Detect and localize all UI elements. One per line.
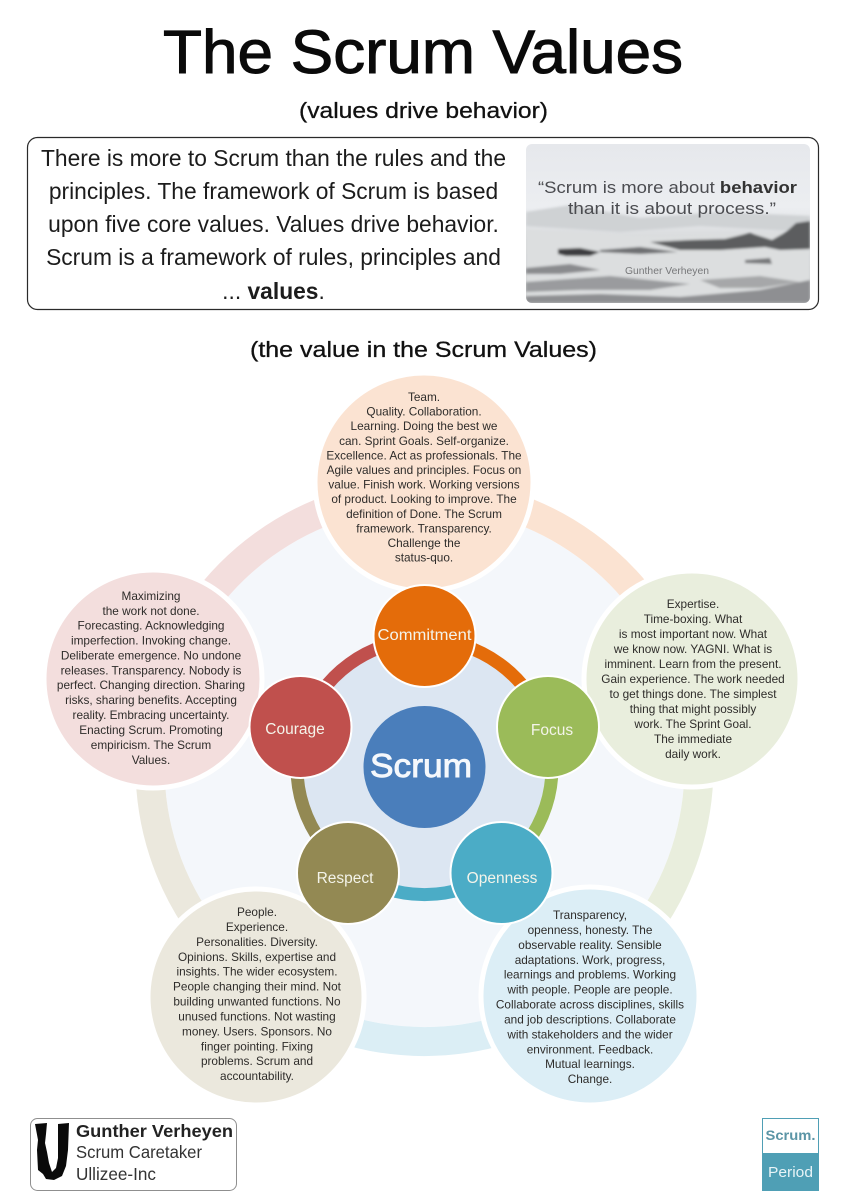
text circle: Focus: daily work. bbox=[665, 747, 721, 761]
text circle: Courage: imperfection. Invoking change. bbox=[71, 634, 231, 648]
text circle: Courage: Values. bbox=[132, 753, 170, 767]
text circle: Commitment: Team. bbox=[408, 390, 440, 404]
inner ring segments bbox=[297, 640, 552, 895]
text circle: Commitment bbox=[315, 373, 533, 591]
outer background disc bbox=[164, 507, 684, 1027]
text circle: Openness: with stakeholders and the wider bbox=[506, 1028, 673, 1042]
centre node: Scrum: Scrum bbox=[370, 747, 472, 784]
text circle: Respect: finger pointing. Fixing bbox=[201, 1040, 313, 1054]
text circle: Focus: Gain experience. The work needed bbox=[601, 672, 785, 686]
text circle: Openness: Change. bbox=[568, 1072, 612, 1086]
quote image: than it is about process.” bbox=[568, 200, 776, 218]
text circle: Focus: The immediate bbox=[654, 732, 732, 746]
node: Respect bbox=[297, 822, 399, 924]
author company: Ullizee-Inc bbox=[76, 1164, 156, 1184]
text circle: Courage: releases. Transparency. Nobody is bbox=[61, 664, 241, 678]
node: Focus bbox=[497, 676, 599, 778]
outer ring segments bbox=[150, 492, 699, 1042]
text circle: Openness: Mutual learnings. bbox=[545, 1057, 635, 1071]
text circle: Respect: People. bbox=[237, 905, 277, 919]
node: Focus: Focus bbox=[531, 722, 573, 739]
text circle: Openness: adaptations. Work, progress, bbox=[515, 953, 665, 967]
text circle: Focus: imminent. Learn from the present. bbox=[604, 657, 782, 671]
text circle: Openness: observable reality. Sensible bbox=[518, 938, 662, 952]
node: Commitment bbox=[374, 585, 476, 687]
node: Respect: Respect bbox=[317, 870, 374, 887]
text circle: Courage: the work not done. bbox=[102, 604, 200, 618]
text circle: Openness: Transparency, bbox=[553, 908, 627, 922]
text circle: Focus bbox=[584, 571, 800, 787]
text circle: Openness: and job descriptions. Collaborate bbox=[504, 1012, 676, 1026]
text circle: Respect: Opinions. Skills, expertise and bbox=[178, 950, 336, 964]
text block: introduction: principles. The framework of Scrum is based bbox=[49, 178, 498, 204]
text circle: Courage: empiricism. The Scrum bbox=[91, 738, 211, 752]
Scrum. Period badge bbox=[762, 1118, 819, 1191]
author name: Gunther Verheyen bbox=[76, 1121, 233, 1141]
text circle: Commitment: of product. Looking to improve. The bbox=[331, 492, 517, 506]
text circle: Respect: problems. Scrum and bbox=[201, 1054, 313, 1068]
text circle: Focus: we know now. YAGNI. What is bbox=[613, 642, 772, 656]
text block: introduction: upon five core values. Values drive behavior. bbox=[48, 211, 499, 237]
text circle: Commitment: Agile values and principles. Focus on bbox=[327, 463, 521, 477]
text block: introduction: Scrum is a framework of rules, principles and bbox=[46, 244, 501, 270]
author badge bbox=[30, 1118, 236, 1190]
text circle: Respect: Experience. bbox=[226, 920, 288, 934]
subtitle: (values drive behavior) bbox=[299, 98, 548, 123]
text circle: Respect: money. Users. Sponsors. No bbox=[182, 1024, 332, 1038]
text circle: Courage bbox=[44, 570, 262, 788]
text circle: Openness bbox=[481, 887, 699, 1105]
quote image: Gunther Verheyen bbox=[625, 265, 709, 277]
text circle: Focus: to get things done. The simplest bbox=[609, 687, 777, 701]
text circle: Commitment: Excellence. Act as professionals. The bbox=[326, 448, 522, 462]
text circle: Commitment: definition of Done. The Scrum bbox=[346, 507, 502, 521]
text circle: Respect: building unwanted functions. No bbox=[173, 994, 341, 1008]
text circle: Respect: accountability. bbox=[220, 1069, 294, 1083]
text circle: Respect: People changing their mind. Not bbox=[173, 980, 342, 994]
text circle: Courage: perfect. Changing direction. Sharing bbox=[57, 678, 245, 692]
Scrum. Period badge: Scrum. bbox=[766, 1128, 816, 1143]
title: The Scrum Values bbox=[163, 18, 683, 86]
text block: introduction: ... values. bbox=[222, 278, 325, 304]
quote image: “Scrum is more about behavior bbox=[538, 179, 798, 197]
centre node: Scrum bbox=[364, 706, 486, 828]
text block: introduction: There is more to Scrum than the rules and the bbox=[41, 145, 506, 171]
author role: Scrum Caretaker bbox=[76, 1142, 202, 1162]
text circle: Focus: Time-boxing. What bbox=[644, 612, 743, 626]
text circle: Commitment: value. Finish work. Working versions bbox=[328, 478, 520, 492]
diagram: Scrum values cycle bbox=[44, 373, 800, 1105]
text circle: Openness: Collaborate across disciplines, skills bbox=[496, 998, 684, 1012]
text circle: Focus: thing that might possibly bbox=[630, 702, 756, 716]
text circle: Commitment: status-quo. bbox=[395, 551, 453, 565]
text circle: Commitment: Quality. Collaboration. bbox=[366, 405, 482, 419]
text circle: Respect bbox=[148, 889, 364, 1105]
panel: introduction bbox=[28, 138, 818, 310]
text circle: Commitment: Learning. Doing the best we bbox=[351, 419, 498, 433]
text circle: Courage: Deliberate emergence. No undone bbox=[61, 648, 242, 662]
text circle: Respect: Personalities. Diversity. bbox=[196, 935, 318, 949]
text circle: Courage: risks, sharing benefits. Accepting bbox=[65, 693, 237, 707]
node: Commitment: Commitment bbox=[378, 627, 472, 644]
text circle: Focus: is most important now. What bbox=[619, 627, 768, 641]
node: Openness bbox=[450, 822, 552, 924]
icon: U logo bbox=[35, 1123, 69, 1180]
text circle: Focus: work. The Sprint Goal. bbox=[633, 717, 752, 731]
Scrum. Period badge: Period bbox=[768, 1164, 813, 1181]
text circle: Commitment: can. Sprint Goals. Self-organize. bbox=[339, 434, 509, 448]
text circle: Openness: openness, honesty. The bbox=[528, 923, 653, 937]
node: Courage bbox=[250, 676, 352, 778]
text circle: Respect: unused functions. Not wasting bbox=[178, 1010, 336, 1024]
text circle: Commitment: framework. Transparency. bbox=[356, 521, 492, 535]
node: Courage: Courage bbox=[265, 721, 325, 738]
quote image bbox=[526, 144, 810, 303]
text circle: Courage: Enacting Scrum. Promoting bbox=[79, 723, 223, 737]
text circle: Courage: Forecasting. Acknowledging bbox=[78, 618, 224, 632]
text circle: Courage: Maximizing bbox=[122, 589, 180, 603]
text circle: Respect: insights. The wider ecosystem. bbox=[176, 964, 338, 978]
text block: introduction bbox=[41, 145, 506, 304]
text circle: Openness: environment. Feedback. bbox=[527, 1042, 653, 1056]
inner disc bbox=[302, 645, 546, 889]
text circle: Openness: learnings and problems. Working bbox=[504, 968, 676, 982]
text circle: Focus: Expertise. bbox=[667, 597, 719, 611]
text circle: Commitment: Challenge the bbox=[388, 536, 461, 550]
node: Openness: Openness bbox=[467, 870, 538, 887]
text circle: Openness: with people. People are people. bbox=[506, 982, 673, 996]
text circle: Courage: reality. Embracing uncertainty. bbox=[73, 708, 229, 722]
section heading: (the value in the Scrum Values) bbox=[250, 337, 597, 362]
